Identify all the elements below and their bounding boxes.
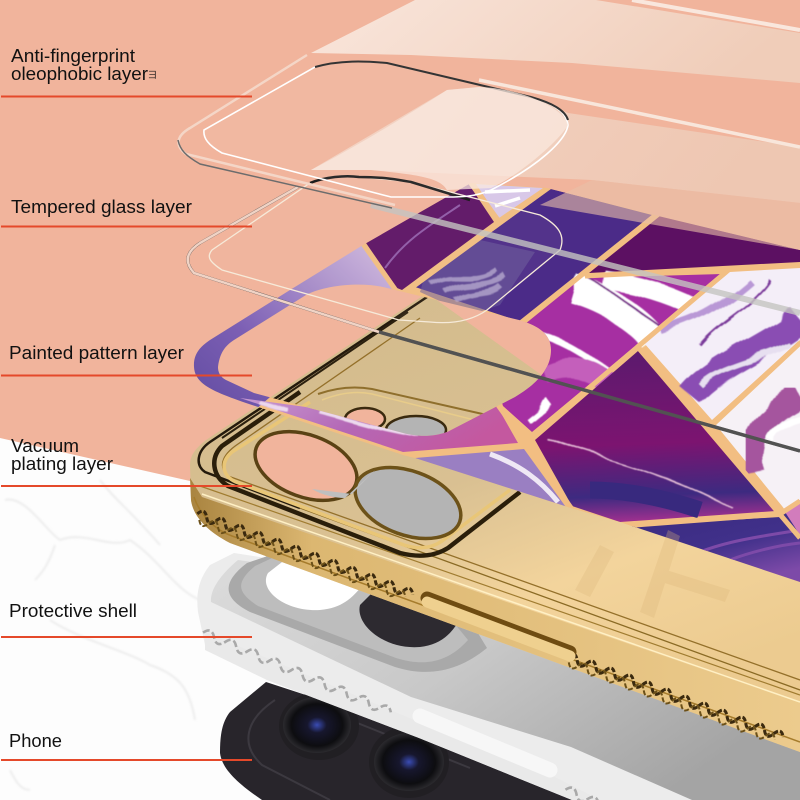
gold side button slot bbox=[427, 598, 570, 656]
label lines bbox=[1, 96, 252, 760]
lens: lower bbox=[369, 726, 449, 798]
label: vacuum plating layer: Vacuum bbox=[11, 436, 79, 456]
tile: pink strip bbox=[240, 398, 518, 452]
gold side band bbox=[190, 478, 800, 752]
tile: small white marble bbox=[476, 184, 543, 218]
label: tempered glass layer: Tempered glass layer bbox=[11, 197, 192, 217]
label: anti-fingerprint oleophobic layer bbox=[11, 46, 157, 84]
gold camera hole: small left bbox=[345, 408, 385, 430]
oleophobic ring bbox=[179, 55, 395, 205]
label: phone: Phone bbox=[9, 731, 62, 751]
tile: left lilac band bbox=[194, 246, 395, 407]
glass grey edge band bbox=[371, 205, 800, 313]
gold camera hole: large salmon bbox=[246, 419, 366, 513]
gold camera hole: small right bbox=[386, 416, 446, 444]
gold camera island ring bbox=[214, 387, 520, 556]
tile: lilac sweep bbox=[415, 449, 568, 510]
label: anti-fingerprint oleophobic layer: oleophobic layer bbox=[11, 64, 148, 84]
background: salmon panel bbox=[0, 0, 800, 600]
tile: magenta and white marble bbox=[480, 274, 722, 432]
tile: lilac and white marble bbox=[644, 268, 800, 420]
label: anti-fingerprint oleophobic layer: Anti-fingerprint bbox=[11, 46, 135, 66]
gold rim lines bbox=[199, 297, 800, 690]
gold camera hole: large grey bbox=[345, 454, 471, 552]
watermark on gold bbox=[575, 530, 730, 618]
tile: dark magenta upper right bbox=[589, 216, 800, 273]
shell hole: white bbox=[266, 548, 362, 610]
tile dividers bbox=[361, 182, 800, 538]
tile: white and mauve marble bbox=[716, 346, 800, 508]
protective shell bbox=[197, 545, 800, 800]
tile: dark magenta bbox=[366, 183, 494, 290]
vacuum plating layer: gold case bbox=[190, 293, 800, 752]
glass dark edge band bbox=[379, 332, 800, 451]
shell camera island bbox=[229, 545, 487, 672]
painted pattern layer bbox=[150, 180, 800, 590]
glass ring outer edge bbox=[188, 187, 800, 451]
tile: indigo bbox=[415, 189, 652, 321]
label: vacuum plating layer: plating layer bbox=[11, 454, 113, 474]
label: vacuum plating layer bbox=[11, 436, 113, 474]
shell hole: dark bbox=[359, 590, 458, 647]
label: painted pattern layer: Painted pattern layer bbox=[9, 343, 184, 363]
tile: bottom indigo bbox=[632, 513, 800, 582]
phone: black device bbox=[220, 682, 575, 800]
lens: upper bbox=[279, 692, 359, 760]
label: anti-fingerprint oleophobic layer: 彐 bbox=[148, 70, 157, 80]
shell ornament bbox=[200, 628, 613, 800]
tile: deep magenta triangle bbox=[535, 351, 776, 522]
gold ornament bbox=[193, 510, 786, 746]
label: protective shell: Protective shell bbox=[9, 601, 137, 621]
glass ring inner window bbox=[209, 176, 562, 323]
tempered glass layer bbox=[188, 87, 800, 451]
anti-fingerprint oleophobic layer bbox=[178, 0, 800, 208]
tile: small pink corner bbox=[785, 500, 800, 535]
oleophobic inner window bbox=[204, 62, 568, 197]
shell side button bbox=[420, 716, 550, 770]
